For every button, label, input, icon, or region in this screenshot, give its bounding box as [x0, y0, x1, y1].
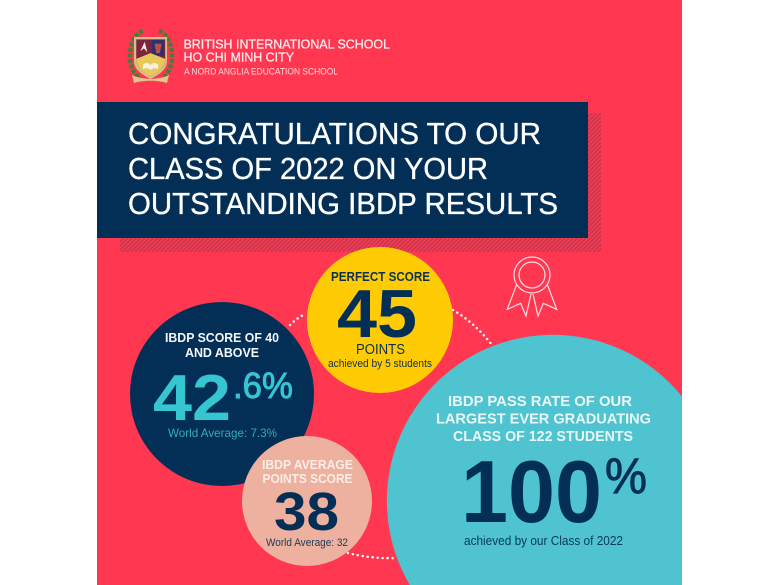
panel: red background: [97, 0, 682, 585]
42.6 percent value: .6%: [233, 365, 293, 406]
panel: yellow perfect score circle: [307, 247, 453, 393]
title banner: [97, 102, 588, 238]
pass rate heading: LARGEST EVER GRADUATING: [436, 410, 651, 428]
icon: award ribbon: [507, 257, 557, 316]
perfect score caption: achieved by 5 students: [328, 358, 432, 370]
pass rate heading: CLASS OF 122 STUDENTS: [453, 428, 633, 445]
panel: navy score 40+ circle: [130, 302, 314, 486]
header: school logo and name: [130, 31, 390, 83]
title line 2: CLASS OF 2022 ON YOUR: [128, 152, 488, 186]
score 40 heading: AND ABOVE: [185, 346, 259, 360]
school name: BRITISH INTERNATIONAL SCHOOL: [184, 38, 390, 52]
average points heading: [262, 458, 353, 486]
38 value: 38: [274, 482, 339, 542]
pass rate heading: IBDP PASS RATE OF OUR: [448, 393, 632, 410]
tagline: A NORD ANGLIA EDUCATION SCHOOL: [184, 66, 338, 76]
average points heading: POINTS SCORE: [262, 472, 352, 486]
world average 32: World Average: 32: [266, 537, 348, 549]
panel: peach average points circle: [242, 436, 372, 566]
world average 7.3: World Average: 7.3%: [168, 426, 277, 440]
average points heading: IBDP AVERAGE: [262, 458, 353, 472]
pass rate caption: achieved by our Class of 2022: [464, 533, 623, 548]
hatched shadow behind banner: [120, 113, 601, 252]
city name: HO CHI MINH CITY: [184, 50, 295, 64]
100 percent value: %: [605, 448, 647, 504]
pass rate heading: [436, 393, 651, 445]
score 40 heading: IBDP SCORE OF 40: [165, 331, 279, 345]
title line 1: CONGRATULATIONS TO OUR: [128, 117, 541, 151]
title line 3: OUTSTANDING IBDP RESULTS: [128, 187, 558, 221]
42.6 percent value: [153, 361, 293, 434]
points label: POINTS: [356, 341, 405, 358]
icon: school crest: [130, 31, 172, 83]
perfect score heading: PERFECT SCORE: [331, 269, 430, 284]
score 40 heading: [165, 331, 279, 360]
panel: teal pass rate circle: [387, 335, 682, 585]
45 value: 45: [337, 276, 417, 352]
dotted connectors: [290, 310, 492, 558]
100 percent value: 100: [461, 442, 602, 541]
42.6 percent value: 42: [153, 361, 231, 434]
